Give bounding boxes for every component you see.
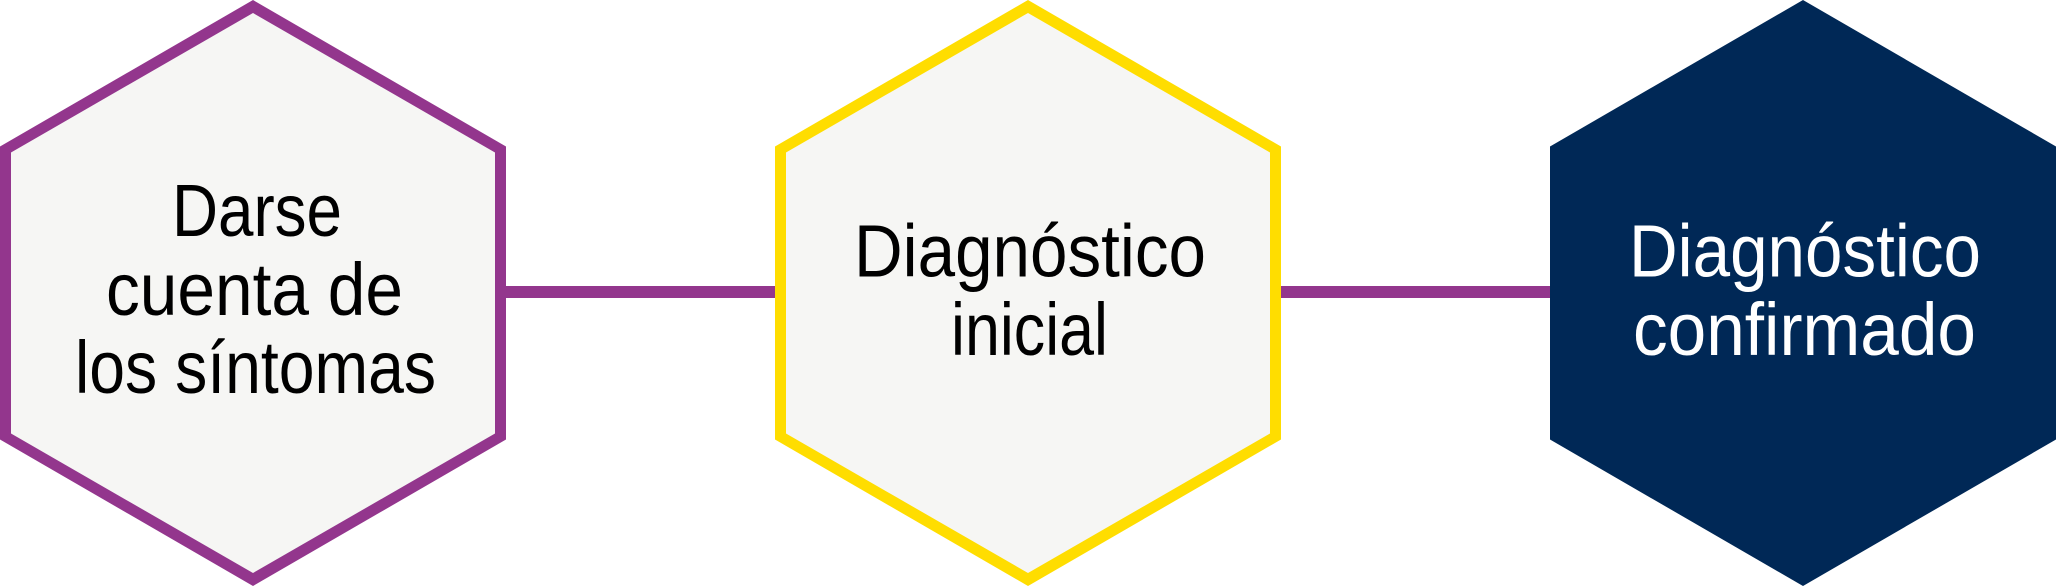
label text: los síntomas (75, 326, 436, 409)
panel: diagnóstico inicial (775, 0, 1281, 586)
connector: symptoms to initial diagnosis (506, 286, 775, 298)
hexagon outline purple (0, 0, 506, 586)
label text: Darse (172, 169, 342, 252)
connector: initial to confirmed diagnosis (1281, 286, 1550, 298)
hexagon fill (786, 13, 1270, 573)
label text: Diagnóstico (1629, 210, 1981, 292)
label text (75, 169, 436, 409)
label text: cuenta de (106, 248, 403, 331)
panel: diagnóstico confirmado (1550, 0, 2056, 586)
label text (854, 210, 1206, 371)
hexagon fill (11, 13, 495, 573)
label text (1629, 210, 1981, 371)
panel: darse cuenta de los síntomas (0, 0, 506, 586)
label text: confirmado (1633, 288, 1976, 371)
label text: inicial (951, 288, 1108, 371)
hexagon navy (1550, 0, 2056, 586)
label text: Diagnóstico (854, 210, 1206, 292)
hexagon outline yellow (775, 0, 1281, 586)
